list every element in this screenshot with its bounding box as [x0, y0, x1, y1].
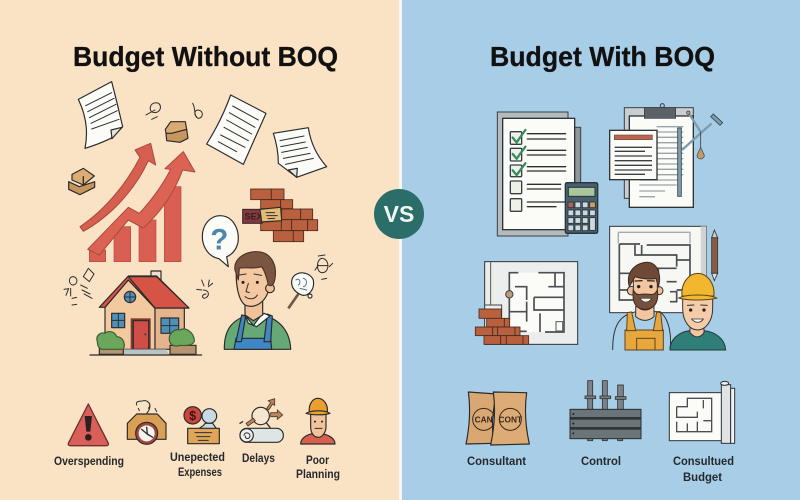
icon: magnifier scribble — [288, 273, 314, 308]
icon: question speech bubble: ? — [210, 223, 228, 256]
label: Consultued Budget: Budget — [683, 470, 722, 484]
icon: scribble middle — [197, 280, 213, 298]
icon: clipboard with documents and tool — [610, 104, 723, 207]
icon: bearded worker — [613, 262, 671, 350]
icon: squiggles — [146, 103, 202, 119]
icon row: left panel — [68, 398, 335, 446]
icon: receipt and coins: $ — [189, 409, 196, 423]
label: Unepected Expenses: Expenses — [178, 465, 222, 479]
icon: pencil — [712, 230, 718, 281]
panel: right background — [402, 0, 800, 500]
chart: rising cost bars — [89, 187, 181, 262]
label: Poor Planning: Planning — [296, 467, 340, 481]
icon: brick wall with tag: SEX — [245, 211, 263, 221]
label: Overspending: Overspending — [54, 454, 124, 468]
icon: worried man — [224, 252, 291, 349]
icon: question speech bubble — [202, 216, 238, 267]
icon: calculator — [565, 183, 598, 233]
icon: paper 2 — [207, 95, 266, 164]
label: Unepected Expenses: Unepected — [170, 450, 225, 464]
VS badge: VS — [384, 201, 414, 227]
icon: floor plan with bricks — [475, 262, 578, 344]
icon: worker with hard hat — [670, 273, 726, 350]
icon: worker with helmet — [301, 398, 335, 444]
icon: box with clock — [127, 401, 166, 444]
label: Delays: Delays — [242, 451, 275, 465]
label: Control: Control — [581, 454, 621, 468]
icon: warning triangle — [68, 404, 108, 446]
arrow: small rising arrow — [80, 143, 156, 231]
icon: boxes left — [69, 168, 95, 195]
icon: cement bags: CAN — [475, 414, 493, 424]
illustration: organised BOQ scene — [475, 104, 726, 350]
icon: paper 3 — [273, 128, 327, 177]
label: Consultant: Consultant — [467, 454, 526, 468]
arrow: large rising zigzag arrow — [88, 152, 195, 255]
title: with BOQ: Budget With BOQ — [490, 41, 715, 72]
icon: brick wall with tag — [243, 189, 318, 242]
icon: checklist — [497, 112, 581, 236]
icon: paper 1 — [78, 82, 123, 148]
icon: boxes top — [165, 122, 188, 142]
icon: scribble left — [64, 268, 94, 305]
icon: cement bags — [466, 392, 529, 445]
icon row: right panel — [466, 381, 735, 445]
title: without BOQ: Budget Without BOQ — [73, 41, 338, 72]
label: Poor Planning: Poor — [306, 453, 329, 467]
icon: receipt and coins — [184, 407, 219, 444]
icon: house — [90, 271, 202, 355]
VS badge — [374, 189, 424, 239]
icon: blueprint with roll — [669, 381, 735, 443]
illustration: budget overrun scene — [64, 82, 333, 355]
panel: left background — [0, 0, 399, 500]
icon: control rack with bars — [570, 381, 641, 441]
icon: cement bags: CONT — [499, 414, 522, 424]
icon: rolled paper with arrows — [240, 399, 283, 442]
icon: scribble right — [315, 255, 333, 279]
icon: large floor plan sheet — [610, 226, 706, 313]
label: Consultued Budget: Consultued — [673, 454, 734, 468]
